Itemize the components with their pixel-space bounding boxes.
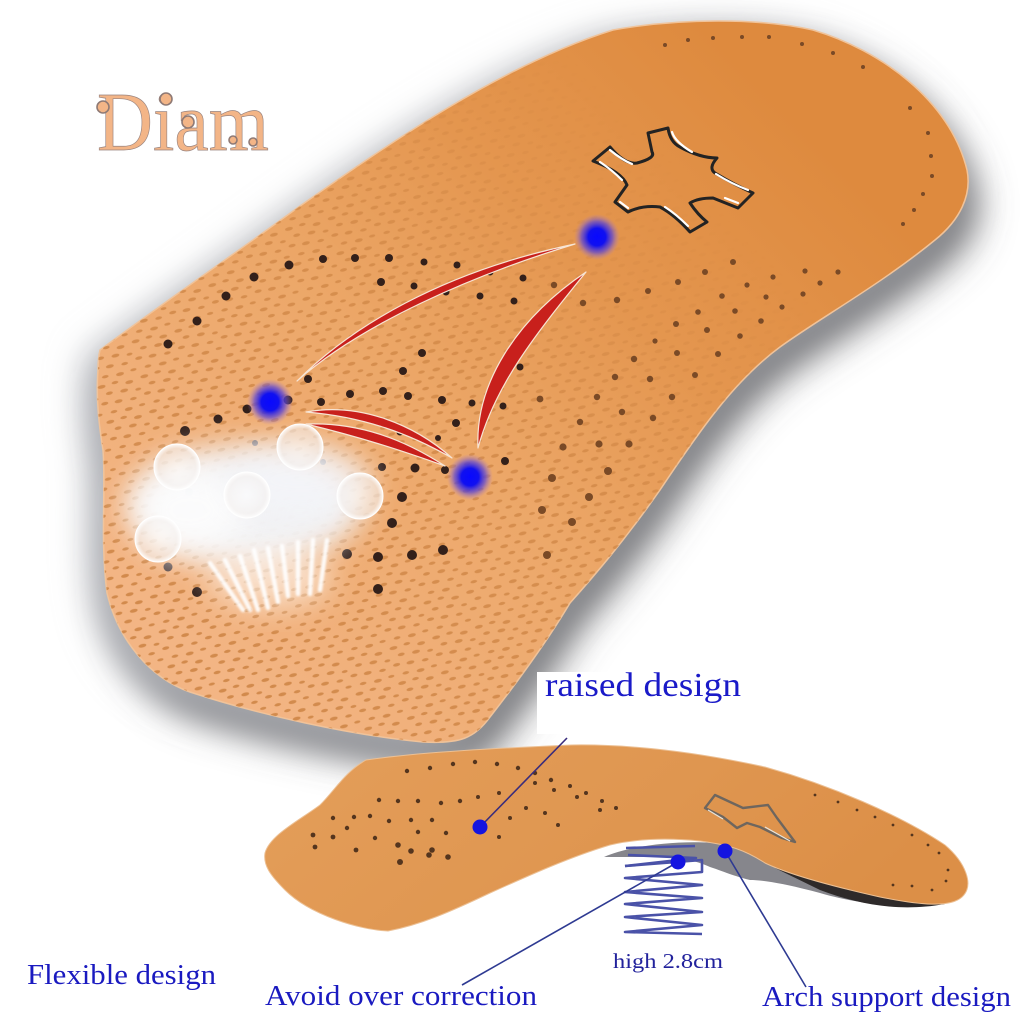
- label: high 2.8cm: high 2.8cm: [613, 949, 723, 973]
- leather side body: [265, 745, 968, 931]
- panel: top insole: [62, 4, 1004, 782]
- label: flexible design: Flexible design: [27, 960, 216, 991]
- under layer: [604, 842, 945, 906]
- brand title: Diam: [97, 76, 269, 169]
- leather body: [97, 21, 968, 742]
- callout line: arch support: [718, 844, 806, 987]
- panel: side view insole: [265, 745, 968, 934]
- side logo mark: [705, 795, 795, 842]
- bubbles: [135, 424, 383, 562]
- left shadow of top insole: [85, 29, 956, 750]
- label backing: raised design: [537, 672, 749, 734]
- leather texture: [97, 72, 750, 742]
- spring: [625, 846, 702, 934]
- air flow white cloud: [127, 424, 383, 610]
- red arcs: [297, 244, 586, 466]
- leather logo mark: [593, 128, 753, 232]
- dark sole edge: [775, 868, 945, 907]
- faint holes below cloud: [164, 440, 326, 572]
- blue glow points: [247, 214, 620, 500]
- label: arch support design: Arch support design: [762, 982, 1011, 1013]
- label: avoid over correction: Avoid over correction: [265, 981, 537, 1012]
- perforation holes small: [537, 35, 934, 559]
- callout line: avoid over correction: [462, 854, 686, 985]
- drop shadow of top insole: [105, 45, 976, 766]
- title swirls: [97, 93, 257, 146]
- callout line: raised design: [472, 738, 567, 834]
- side holes: [311, 760, 949, 891]
- perforation holes large: [164, 254, 526, 597]
- label: raised design: raised design: [545, 667, 741, 704]
- fan strokes: [210, 540, 327, 610]
